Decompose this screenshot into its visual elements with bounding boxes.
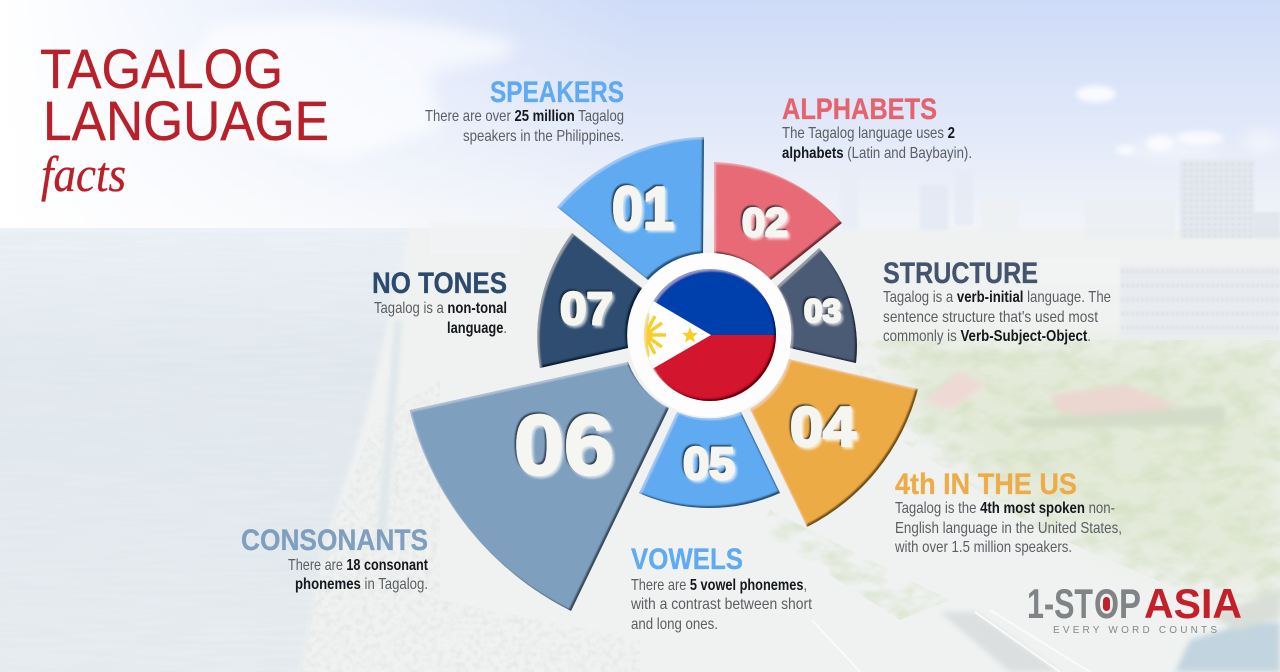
wedge 07: 07 bbox=[560, 283, 613, 334]
text block: structure: STRUCTURE bbox=[883, 257, 1038, 290]
text block: 4th in the US: with over 1.5 million speakers. bbox=[894, 539, 1072, 556]
text block: speakers: speakers in the Philippines. bbox=[463, 128, 624, 145]
text block: vowels: with a contrast between short bbox=[630, 596, 812, 613]
logo: 1-Stop Asia: 1-ST bbox=[1027, 580, 1093, 627]
text block: consonants: CONSONANTS bbox=[241, 524, 428, 557]
title: LANGUAGE bbox=[43, 89, 329, 152]
text block: no tones bbox=[372, 267, 507, 337]
wedge 06: 06 bbox=[514, 398, 614, 492]
text block: no tones: NO TONES bbox=[372, 267, 507, 300]
text block: speakers bbox=[425, 76, 624, 145]
text block: no tones: Tagalog is a non-tonal bbox=[374, 300, 507, 317]
text block: vowels bbox=[630, 543, 812, 633]
text block: structure: Tagalog is a verb-initial language. The bbox=[883, 289, 1111, 306]
text block: structure: commonly is Verb-Subject-Object. bbox=[883, 328, 1091, 345]
logo: 1-Stop Asia: EVERY WORD COUNTS bbox=[1053, 625, 1217, 636]
logo: 1-Stop Asia: O bbox=[1094, 580, 1119, 627]
wedge 02: 02 bbox=[742, 201, 788, 245]
text block: vowels: VOWELS bbox=[631, 543, 743, 576]
text block: 4th in the US: English language in the United States, bbox=[895, 520, 1122, 537]
white ring around flag bbox=[628, 253, 792, 417]
pie wheel bbox=[410, 137, 918, 611]
wedge 07 bbox=[537, 233, 642, 368]
land bbox=[296, 228, 1280, 672]
wedge 03 bbox=[777, 248, 857, 363]
text block: speakers: SPEAKERS bbox=[490, 76, 624, 109]
text block: alphabets bbox=[782, 93, 972, 162]
logo: 1-Stop Asia: P bbox=[1119, 580, 1141, 627]
text block: consonants bbox=[241, 524, 429, 593]
wedge 04: 04 bbox=[790, 395, 856, 458]
icon: Philippine flag bbox=[644, 269, 776, 401]
text block: consonants: There are 18 consonant bbox=[288, 557, 429, 574]
title: TAGALOG bbox=[40, 37, 283, 100]
text block: speakers: There are over 25 million Tagalog bbox=[425, 108, 624, 125]
text block: 4th in the US: Tagalog is the 4th most spoken non- bbox=[895, 500, 1115, 517]
text block: alphabets: ALPHABETS bbox=[782, 93, 937, 126]
wedge 01: 01 bbox=[612, 175, 674, 242]
text block: alphabets: alphabets (Latin and Baybayin). bbox=[782, 145, 972, 162]
wedge 02 bbox=[714, 162, 842, 280]
wedge 01 bbox=[557, 137, 704, 280]
text block: 4th in the US bbox=[894, 468, 1122, 556]
water bbox=[0, 228, 560, 672]
text block: alphabets: The Tagalog language uses 2 bbox=[782, 125, 955, 142]
text block: consonants: phonemes in Tagalog. bbox=[295, 576, 428, 593]
text block: vowels: and long ones. bbox=[631, 616, 718, 633]
wedge 05 bbox=[639, 412, 780, 508]
wedge 05: 05 bbox=[683, 438, 735, 489]
text block: no tones: language. bbox=[447, 320, 507, 337]
logo: 1-Stop Asia bbox=[1027, 580, 1242, 636]
text block: vowels: There are 5 vowel phonemes, bbox=[631, 577, 807, 594]
logo: 1-Stop Asia: ASIA bbox=[1144, 580, 1242, 627]
buildings bbox=[430, 160, 1280, 338]
title bbox=[40, 37, 329, 202]
text block: structure: sentence structure that's used most bbox=[883, 309, 1098, 326]
text block: 4th in the US: 4th IN THE US bbox=[895, 468, 1077, 501]
title: facts bbox=[41, 146, 126, 202]
wedge 04 bbox=[750, 359, 918, 527]
wedge 06 bbox=[410, 362, 669, 611]
text block: structure bbox=[883, 257, 1111, 345]
wedge 03: 03 bbox=[804, 293, 841, 329]
